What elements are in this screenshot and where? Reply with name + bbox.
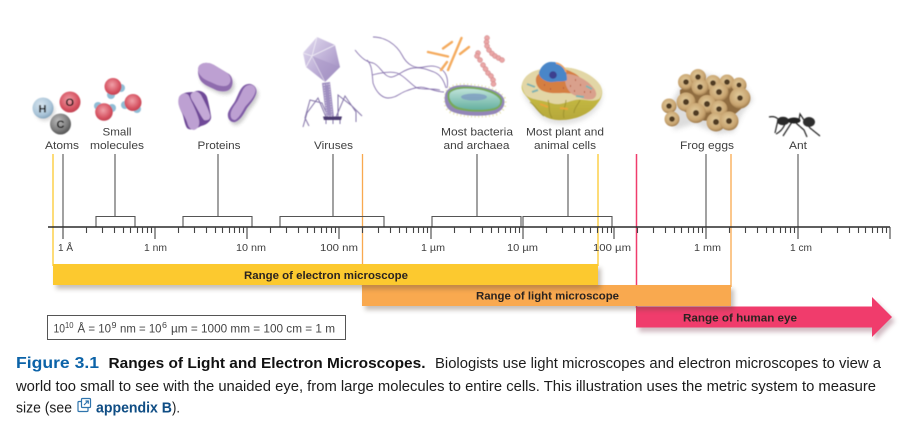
specimen labels: [45, 126, 807, 152]
specimen labels: Frog eggs: [680, 140, 735, 152]
icon: small molecules: [94, 78, 142, 121]
range bar: light microscope: Range of light microscope: [476, 290, 619, 302]
specimen labels: Proteins: [198, 140, 241, 152]
icon: external link: [78, 398, 90, 412]
scale labels: [58, 241, 812, 254]
unit conversion box: 10: [65, 321, 74, 330]
unit conversion box: nm = 10: [120, 324, 162, 336]
scale labels: 1 nm: [144, 242, 167, 254]
scale labels: 100 µm: [593, 242, 631, 254]
icon: cocci chains: [474, 36, 504, 86]
size scale axis: [48, 227, 890, 239]
range arrow: human eye: [636, 297, 895, 341]
vertical line: electron microscope range: [53, 154, 598, 266]
range bar: light microscope: [362, 285, 734, 310]
icon: atoms: O: [66, 97, 74, 109]
scale labels: 1 mm: [694, 242, 721, 254]
unit conversion box: Å = 10: [78, 322, 111, 336]
scale labels: 10 µm: [507, 242, 538, 254]
icon: plant and animal cell: [522, 62, 602, 124]
unit conversion box: µm = 1000 mm = 100 cm = 1 m: [171, 324, 335, 336]
unit conversion box: 10: [54, 324, 65, 336]
specimen leader lines and brackets: [63, 154, 798, 227]
specimen labels: Most bacteria: [441, 126, 514, 138]
figure caption: Ranges of Light and Electron Microscopes.: [108, 356, 426, 372]
icon: bacterium with flagella: [355, 36, 504, 116]
icon: atoms: [32, 92, 80, 134]
icon: rod bacteria: [428, 38, 469, 70]
figure caption: Biologists use light microscopes and electron microscopes to view a: [435, 356, 882, 372]
icon: frog eggs: [662, 69, 753, 134]
icon: virus: [303, 37, 362, 127]
scale labels: 1 cm: [790, 242, 812, 254]
range arrow: human eye: Range of human eye: [683, 312, 797, 324]
specimen labels: and archaea: [444, 140, 510, 152]
specimen labels: Most plant and: [526, 126, 604, 138]
specimen labels: Viruses: [314, 140, 354, 152]
figure caption: appendix B: [96, 400, 172, 416]
specimen labels: Ant: [789, 140, 807, 152]
range bar: electron microscope: [53, 264, 601, 289]
figure caption: size (see: [16, 400, 72, 416]
icon: atoms: H: [38, 104, 46, 116]
specimen labels: Small: [102, 126, 132, 138]
figure caption: ).: [172, 400, 180, 416]
scale labels: 1 Å: [58, 241, 73, 254]
vertical line: light microscope range: [362, 154, 731, 287]
specimen labels: molecules: [90, 140, 145, 152]
icon: proteins: [178, 63, 258, 130]
scale labels: 1 µm: [421, 242, 445, 254]
icon: atoms: C: [56, 119, 64, 131]
range bar: electron microscope: Range of electron microscope: [244, 270, 408, 282]
unit conversion box: 9: [112, 321, 117, 330]
scale labels: 10 nm: [236, 242, 266, 254]
unit conversion box: 6: [162, 321, 168, 330]
vertical line: human eye range: [636, 154, 638, 308]
figure caption: Figure 3.1: [16, 355, 99, 372]
scale labels: 100 nm: [320, 242, 358, 254]
specimen labels: Atoms: [45, 140, 80, 152]
unit conversion box: [48, 316, 346, 340]
icon: ant: [769, 114, 820, 137]
specimen labels: animal cells: [534, 140, 597, 152]
figure caption: world too small to see with the unaided eye, from large molecules to entire cells. This illustration uses the metric system to measure: [15, 379, 876, 395]
cell nucleus: [539, 62, 567, 82]
figure caption: [15, 355, 882, 416]
